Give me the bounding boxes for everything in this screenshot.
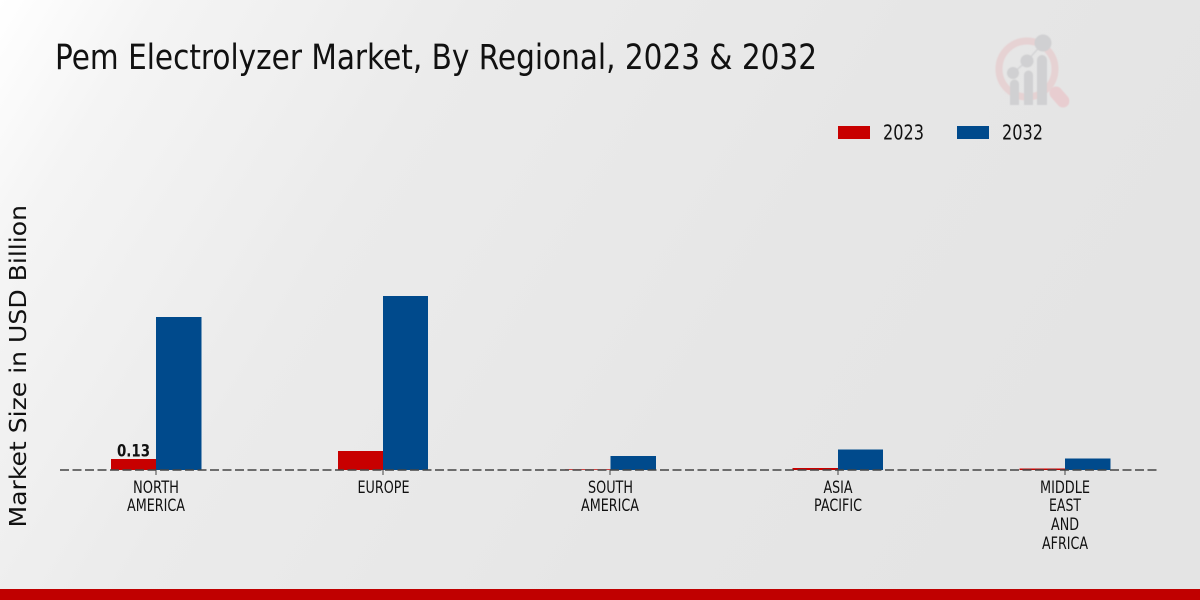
label: North America	[127, 478, 185, 516]
label: Middle East and Africa: MIDDLE	[1040, 478, 1090, 498]
label: Asia Pacific	[814, 478, 862, 516]
legend item: 2023	[838, 120, 924, 144]
y axis title: Market Size in USD Billion	[6, 205, 32, 528]
x axis baseline	[60, 470, 1160, 475]
bars: Europe	[338, 296, 428, 470]
label: Middle East and Africa	[1040, 478, 1090, 554]
bar chart	[60, 296, 1160, 475]
legend item: 2023: 2023	[883, 120, 924, 144]
label: Europe: EUROPE	[358, 478, 410, 498]
label: Middle East and Africa: EAST	[1049, 496, 1081, 516]
label: Middle East and Africa: AND	[1051, 515, 1079, 535]
bars: North America	[111, 317, 202, 470]
legend item: 2032: 2032	[1002, 120, 1043, 144]
label: North America: NORTH	[133, 478, 179, 498]
footer bar	[0, 589, 1200, 600]
x axis category labels	[127, 478, 1090, 554]
data label: 0.13: 0.13	[117, 442, 150, 462]
label: South America: AMERICA	[581, 496, 639, 516]
label: Asia Pacific: ASIA	[824, 478, 853, 498]
bars: Asia Pacific	[792, 450, 883, 470]
label: South America: SOUTH	[588, 478, 633, 498]
title: Pem Electrolyzer Market, By Regional, 2023 & 2032	[55, 38, 817, 78]
legend	[838, 120, 1043, 144]
bars: South America	[565, 456, 656, 470]
legend item: 2032	[957, 120, 1043, 144]
bars: Middle East and Africa	[1020, 458, 1110, 470]
label: Middle East and Africa: AFRICA	[1042, 534, 1088, 554]
label: North America: AMERICA	[127, 496, 185, 516]
label: South America	[581, 478, 639, 516]
label: Asia Pacific: PACIFIC	[814, 496, 862, 516]
icon: magnifier logo watermark	[999, 34, 1063, 105]
